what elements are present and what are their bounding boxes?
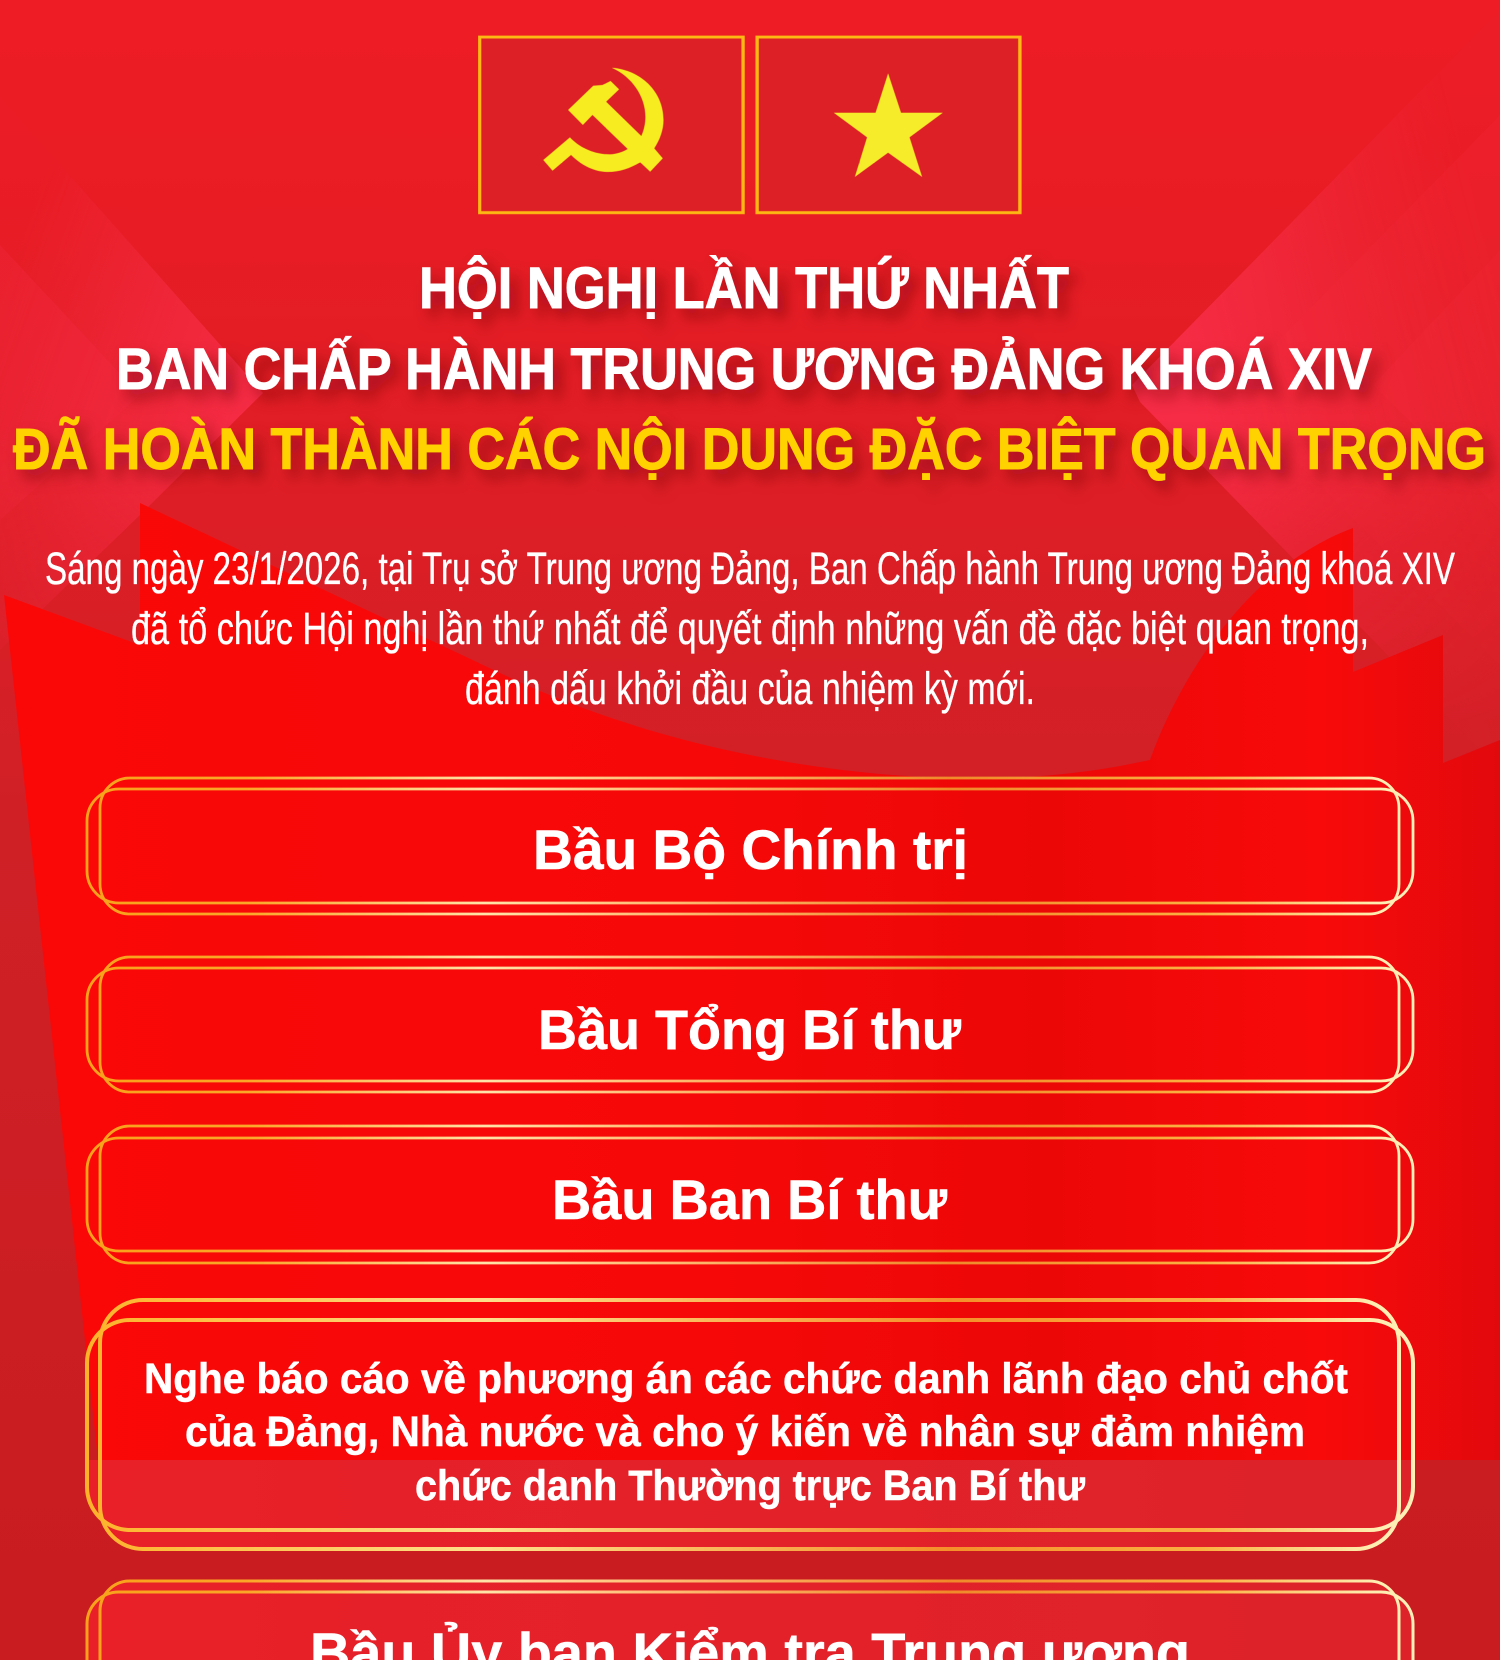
box: Bầu Tổng Bí thư (87, 957, 1413, 1092)
box: Nghe báo cáo: của Đảng, Nhà nước và cho ý kiến về nhân sự đảm nhiệm (185, 1408, 1305, 1456)
intro paragraph: đánh dấu khởi đầu của nhiệm kỳ mới. (465, 663, 1035, 714)
flags (480, 37, 1020, 213)
lower box fills (88, 1460, 1412, 1660)
title (13, 256, 1486, 482)
box: Nghe báo cáo (87, 1300, 1413, 1549)
box: Bầu Tổng Bí thư: Bầu Tổng Bí thư (538, 998, 961, 1061)
title: HỘI NGHỊ LẦN THỨ NHẤT (419, 256, 1069, 321)
title: BAN CHẤP HÀNH TRUNG ƯƠNG ĐẢNG KHOÁ XIV (116, 337, 1372, 402)
box: Bầu Bộ Chính trị: Bầu Bộ Chính trị (533, 818, 968, 881)
box: Bầu Ban Bí thư (87, 1126, 1413, 1263)
box: Bầu Ủy ban Kiểm tra Trung ương (87, 1581, 1413, 1660)
box: Nghe báo cáo: chức danh Thường trực Ban Bí thư (415, 1462, 1086, 1510)
intro paragraph (45, 543, 1455, 714)
box: Bầu Ban Bí thư: Bầu Ban Bí thư (552, 1168, 947, 1231)
party flag (480, 37, 743, 213)
box: Bầu Bộ Chính trị (87, 778, 1413, 914)
red flag shape (4, 503, 1500, 1460)
box: Nghe báo cáo: Nghe báo cáo về phương án các chức danh lãnh đạo chủ chốt (144, 1355, 1348, 1403)
national flag (757, 37, 1020, 213)
